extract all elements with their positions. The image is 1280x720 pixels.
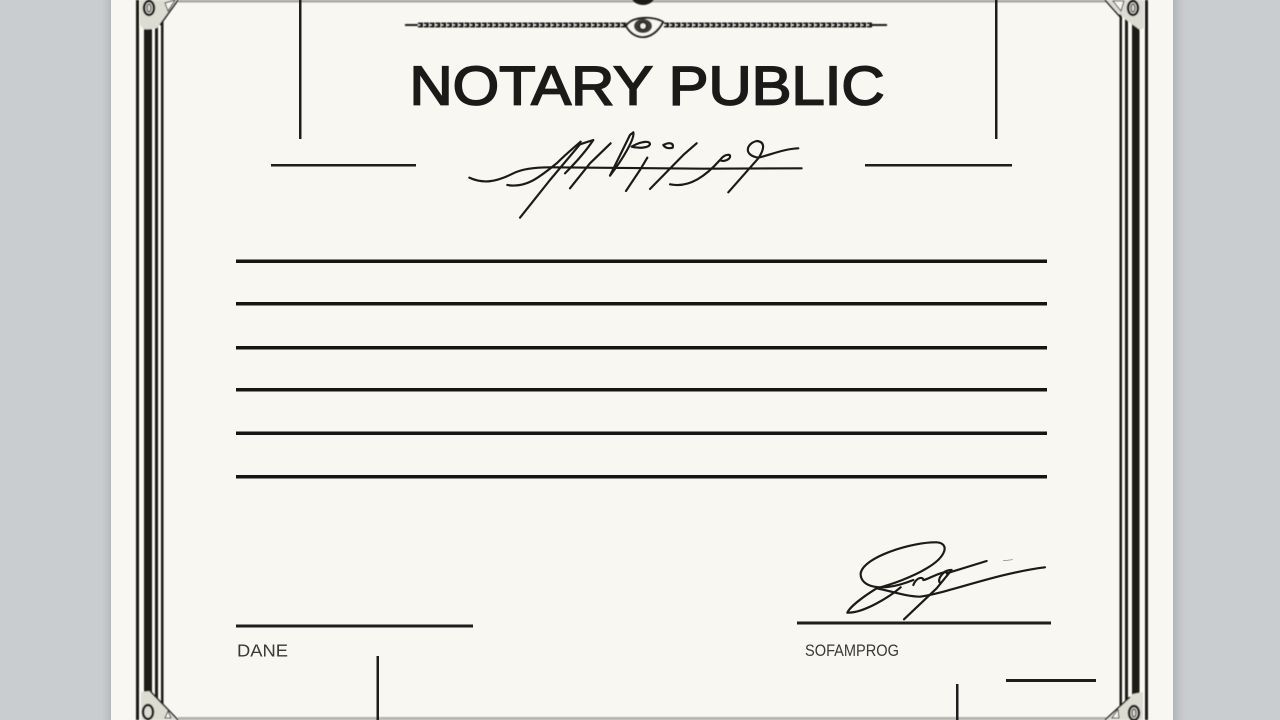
bottom vertical rule right bbox=[956, 684, 958, 720]
title: NOTARY PUBLIC bbox=[410, 54, 884, 116]
center eye emblem bbox=[626, 18, 663, 37]
bottom horizontal rule right bbox=[1006, 679, 1096, 682]
bottom vertical rule left bbox=[376, 656, 379, 720]
top medallion bbox=[632, 0, 654, 5]
ruled text lines bbox=[236, 260, 1047, 478]
handwritten signature bbox=[847, 542, 1045, 619]
signature line bbox=[797, 622, 1051, 624]
chain: right bbox=[664, 22, 887, 28]
date field bbox=[236, 624, 473, 660]
certificate frame bbox=[136, 0, 1148, 720]
top vertical rule left bbox=[299, 0, 302, 139]
corner ornament: top left bbox=[140, 0, 178, 29]
corner ornament: bottom right bbox=[1105, 692, 1143, 720]
frame: bottom edge bbox=[178, 717, 1116, 720]
date line bbox=[236, 624, 473, 628]
frame: top edge bbox=[178, 0, 1116, 2]
top vertical rule right bbox=[995, 0, 998, 139]
rule beside signature left bbox=[271, 164, 416, 166]
rule beside signature right bbox=[865, 164, 1012, 166]
corner ornament: bottom left bbox=[141, 691, 178, 720]
frame: left rules bbox=[136, 0, 164, 720]
notary signature bbox=[469, 132, 802, 218]
date label: DANE bbox=[237, 640, 288, 660]
chain: left bbox=[405, 24, 628, 26]
frame: right rules bbox=[1120, 0, 1148, 720]
ornamental chain divider bbox=[405, 0, 887, 37]
corner ornament: top right bbox=[1105, 0, 1144, 30]
signature label: SOFAMPROG bbox=[805, 641, 899, 660]
signature field bbox=[797, 542, 1051, 660]
